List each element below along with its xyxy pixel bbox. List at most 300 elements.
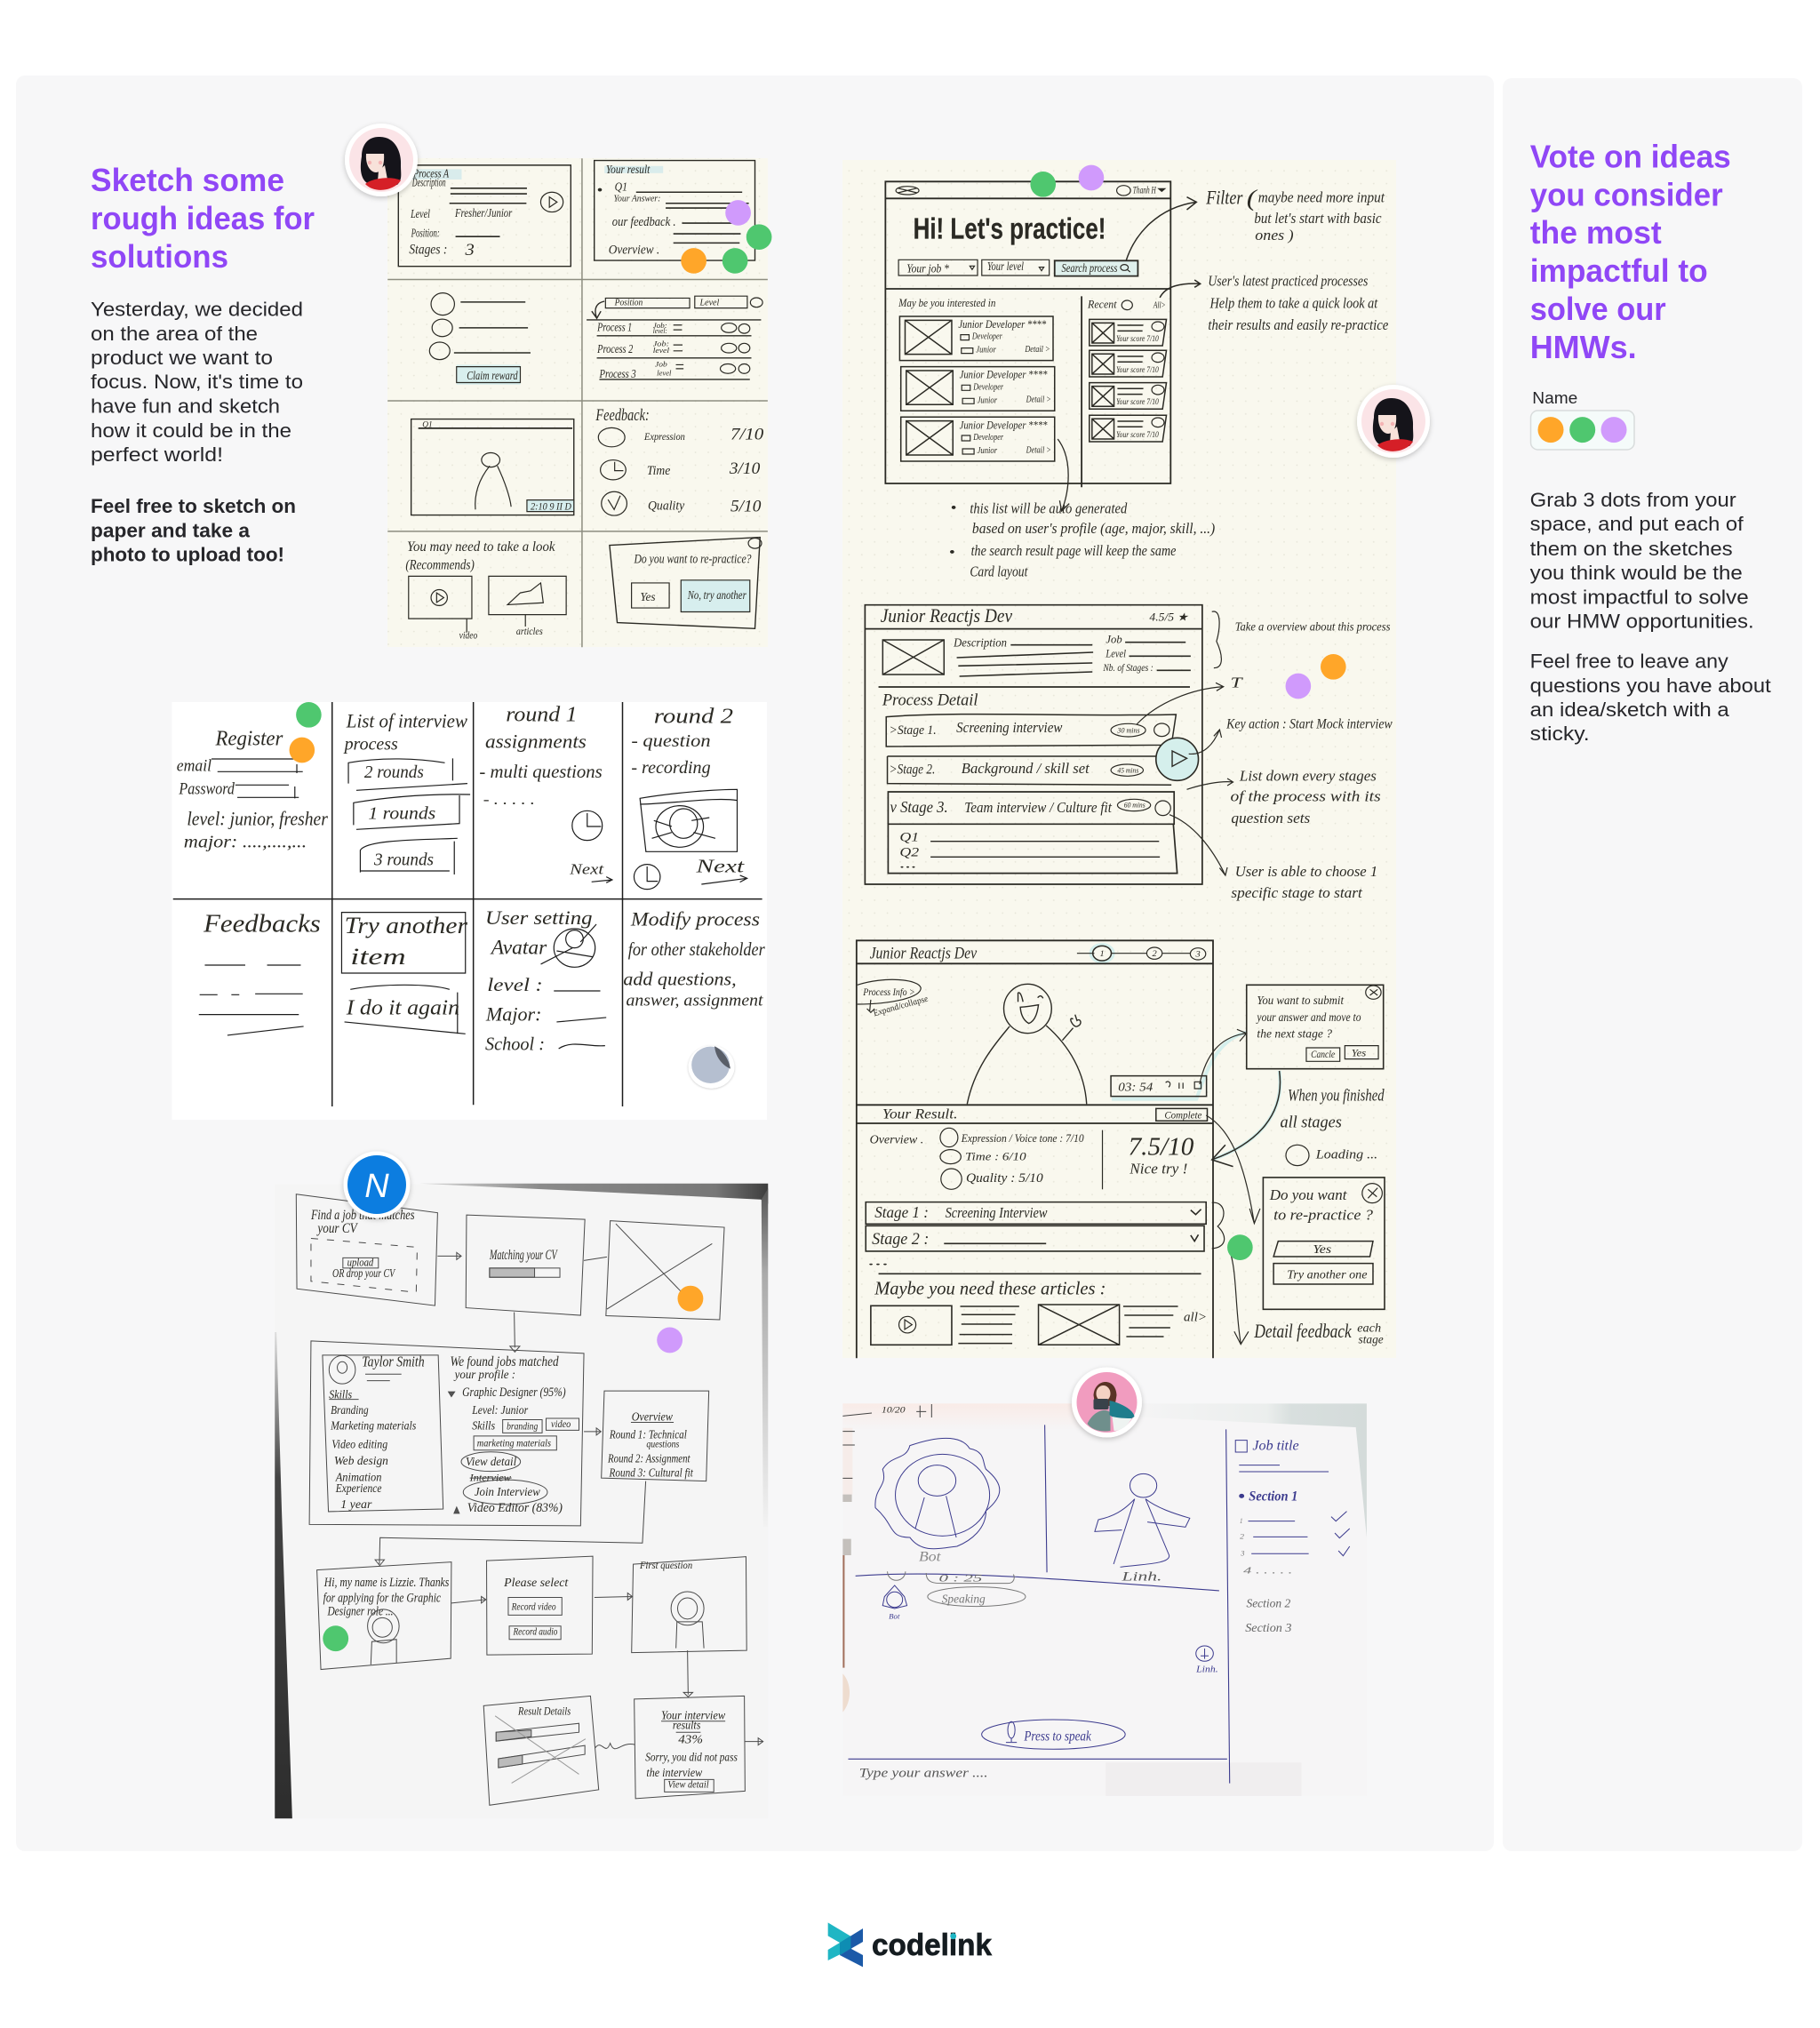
character: smiling avatar [967,984,1087,1104]
wireframe: process description: Position: [411,227,440,240]
frame: overview: Junior Reactjs Dev [881,604,1013,627]
cell: modify process: Modify process [630,907,760,930]
cell: try another: I do it again [346,995,459,1020]
list: recent cards: Recent [1087,299,1117,311]
heading: sketch some rough ideas: rough ideas for [91,200,315,236]
wireframe: process description: Level [410,208,430,221]
wireframe: recommendations: You may need to take a look [407,539,555,555]
cell: modify process: add questions, [623,970,737,989]
cell: feedbacks [199,911,321,1035]
screen: profile and matched jobs: Video editing [331,1437,387,1451]
text block: intro: product we want to [91,347,273,369]
cell: modify process: answer, assignment [627,991,763,1010]
results section: Overview . [870,1133,923,1146]
arrow and bullets: auto generated list: Card layout [970,563,1028,580]
wireframe: process list: Job: [653,340,669,348]
sketch background: notebook wireframes [387,158,768,647]
arrows and note: detail feedback: stage [1359,1333,1384,1346]
frame: overview: 4.5/5 ★ [1149,611,1189,624]
search controls: Search process [1062,261,1117,275]
annotations: process detail notes: T [1231,675,1243,691]
articles: all> [1184,1310,1207,1324]
cell: user setting: User setting [485,906,593,929]
wireframe: feedback scores [595,405,763,515]
wireframe: recommendations: (Recommends) [405,557,475,573]
icon: teal play button [1156,738,1199,780]
sidebar: sections: Job title [1252,1438,1299,1453]
modal: re-practice [1263,1178,1385,1309]
list: process stages: 45 mins [1117,767,1139,775]
frame: interview: Junior Reactjs Dev [870,943,977,962]
avatar: girl with dark hair [1357,385,1430,458]
cell: register: Register [215,727,283,750]
arrow: all stages finished: When you finished [1288,1086,1385,1105]
vote dots [290,702,322,762]
text block: grab 3 dots: most impactful to solve [1530,587,1749,608]
wireframe: your result: Your Answer: [614,193,660,204]
text block: intro: how it could be in the [91,419,291,442]
frame: overview: Nb. of Stages : [1103,663,1153,674]
text block: intro [91,299,303,466]
wireframe: feedback scores: Feedback: [595,405,650,424]
figure: bot [875,1438,1000,1564]
wireframe: claim reward [429,293,531,385]
text block: grab 3 dots: space, and put each of [1530,513,1744,535]
heading: vote on ideas: solve our [1530,291,1666,327]
search controls: Your job * [906,262,950,275]
screen: upload CV: upload [347,1257,374,1269]
cell: interview process: 3 rounds [373,850,434,869]
cell: try another: item [350,943,406,970]
stage accordion: Stage 2 : [872,1230,929,1248]
video control bar [1111,1029,1247,1097]
frame: interview: 2 [1152,949,1157,959]
screen: interview results: Your interview [661,1708,726,1722]
list: interested cards: Junior [978,395,997,405]
wireframe: process list: level: [653,328,667,336]
arrow: all stages finished: Loading ... [1315,1146,1377,1162]
cell: user setting: level : [487,975,543,995]
screen: profile and matched jobs: Interview [468,1473,511,1484]
results section: Quality : 5/10 [966,1170,1043,1185]
screen: interview results [595,1696,763,1799]
info pill: Expand/collapse [871,994,930,1018]
cell: try another: Try another [345,912,468,938]
text block: leave questions: an idea/sketch with a [1530,699,1730,721]
cell: round 1: - multi questions [479,762,603,782]
screen: profile and matched jobs: Skills [472,1418,495,1433]
wireframe: feedback scores: 7/10 [730,425,763,443]
list: interested cards: Developer [973,382,1003,392]
screen: profile and matched jobs: your profile : [453,1368,515,1382]
screen: matching CV [466,1215,607,1352]
screen: profile and matched jobs: Join Interview [475,1485,541,1498]
modal: submit answer: your answer and move to [1256,1011,1361,1024]
screen: profile and matched jobs: Level: Junior [471,1403,528,1417]
list: interested cards: Developer [973,432,1003,443]
modal: submit answer: Cancle [1311,1049,1335,1060]
screen: record select: Please select [503,1576,569,1589]
list: process stages: ... [899,857,917,871]
heading: vote on ideas: impactful to [1530,252,1708,289]
arrow: all stages finished [1212,1071,1385,1167]
annotations: process detail notes: User is able to choose 1 [1235,864,1377,880]
articles [871,1279,1207,1345]
arrows and note: detail feedback: Detail feedback [1254,1320,1352,1342]
list: interested cards: Junior [976,345,996,355]
figure: bot: Bot [919,1548,942,1564]
list: interested cards: Junior Developer **** [958,319,1047,331]
screen: interview results: the interview [646,1765,703,1779]
screen: upload CV [296,1194,461,1305]
cell: interview process: List of interview [346,709,467,731]
list: process stages: v Stage 3. [890,798,948,816]
vote dots [323,1286,703,1651]
wireframe: your result: Your result [606,164,651,177]
list: process stages: Q2 [899,844,920,859]
list: recent cards: All> [1153,300,1166,310]
wireframe: process list: Process 2 [596,343,634,356]
list: interested cards [898,298,1055,461]
info pill: Process Info > [862,986,915,998]
annotations: process detail notes: Take a overview about this process [1235,619,1391,634]
wireframe: your result: our feedback . [612,213,676,229]
arrows and note: detail feedback: each [1357,1321,1381,1335]
logo: codelink [828,1922,992,1967]
heading: vote on ideas: the most [1530,214,1662,251]
cell: round 2: - question [631,731,711,751]
wireframe: re-practice modal: No, try another [687,589,746,602]
heading: sketch some rough ideas: Sketch some [91,162,284,198]
list: process stages: Process Detail [882,691,978,709]
wireframe: process list: Position [614,297,643,307]
list: interested cards: Developer [971,331,1002,341]
cell: try another [341,912,468,1034]
results section: 7.5/10 [1129,1133,1193,1161]
cell: round 1: - . . . . . [483,792,535,808]
vote dot [1227,1234,1253,1260]
cell: modify process: for other stakeholder [628,939,765,960]
arrow and note: filter [1126,185,1385,260]
wireframe: feedback scores: Time [647,463,670,478]
screen: profile and matched jobs: branding [507,1421,538,1433]
annotations: process detail notes: question sets [1231,810,1310,826]
annotations: process detail notes: specific stage to start [1231,885,1362,901]
list: process stages: Screening interview [956,720,1063,736]
cell: round 1: Next [569,861,604,878]
screen: interviewer greeting: Designer role ... [327,1603,393,1618]
frame: home page [885,181,1170,487]
list: interested cards: May be you interested in [898,298,995,309]
sidebar: sections: 3 [1241,1549,1245,1558]
figure: Linh: Linh. [1121,1569,1161,1584]
sketch: whiteboard flow [172,702,767,1120]
annotations: process detail notes: List down every stages [1239,769,1377,785]
search controls: Your level [987,259,1024,273]
screen: interview overview: Round 2: Assignment [607,1451,690,1465]
text block: leave questions: sticky. [1530,723,1590,745]
text block: grab 3 dots: you think would be the [1530,562,1743,584]
text block: leave questions [1530,650,1771,745]
wireframe: process list: Process 1 [597,321,632,334]
icon: Linh small: Linh. [1195,1665,1218,1674]
modal: submit answer: the next stage ? [1257,1026,1332,1041]
modal: submit answer [1247,985,1384,1069]
screen: profile and matched jobs: Experience [335,1481,382,1495]
list: process stages: Q1 [899,830,919,844]
wireframe: re-practice modal: Yes [640,591,656,604]
screen: profile and matched jobs: View detail [466,1455,517,1469]
wireframe: feedback scores: Quality [648,497,684,513]
wireframe: process description: Description [411,176,446,189]
sketch: home page wireframe [885,165,1389,580]
screen: upload CV: your CV [315,1222,358,1237]
voting token: name and dots [1530,389,1634,450]
wireframe: process description: Stages : [409,242,447,258]
cell: round 1 [479,703,612,882]
annotations: process detail notes: Key action : Start Mock interview [1225,716,1393,731]
arrow and note: filter: ones ) [1255,227,1294,244]
list: process stages [882,691,1177,874]
results section [870,1106,1207,1189]
panel: sketch board [16,76,1494,1851]
screen: interview overview: questions [646,1439,679,1450]
heading: vote on ideas [1530,139,1731,365]
scribbles: top-left notes: 10/20 [882,1406,906,1415]
status row: 0 : 25 [938,1572,983,1584]
text block: upload note [91,495,296,565]
screen: matching CV: Matching your CV [489,1248,558,1263]
avatar: woman with camera [1072,1367,1142,1438]
results section: Nice try ! [1129,1162,1187,1178]
frame: overview: Description [953,636,1007,650]
icon: peeling sticker [689,1046,734,1089]
arrow and note: filter: maybe need more input [1258,189,1385,206]
sketch: notebook wireframes [387,158,771,647]
arrow and note: recent processes: Help them to take a quick look at [1209,296,1378,312]
logo: codelink: codelink [872,1928,992,1962]
arrow and note: recent processes: User's latest practiced processes [1208,274,1368,290]
text block: intro: have fun and sketch [91,395,280,418]
screen: record select: Record audio [513,1627,557,1638]
scribbles: top-left notes [842,1404,931,1478]
screen: upload CV: Find a job that matches [310,1209,415,1224]
sidebar: sections: 1 [1240,1517,1242,1526]
list: interested cards: Detail > [1026,395,1051,404]
list: recent cards [1087,299,1167,442]
screen: profile and matched jobs: Web design [334,1454,388,1468]
screen: profile and matched jobs: Taylor Smith [362,1354,425,1370]
arrow and note: filter: but let's start with basic [1254,210,1382,227]
screen: profile and matched jobs: Graphic Designer (95%) [462,1384,566,1399]
wireframe: process list: level [657,370,672,378]
screen: first question: First question [639,1561,692,1572]
frame: interview: 1 [1099,949,1105,959]
text block: intro: on the area of the [91,323,258,345]
wireframe: process description [398,165,571,267]
cell: interview process: 2 rounds [364,762,424,782]
stage accordion: ... [868,1253,890,1268]
avatar: N badge: N [364,1168,389,1205]
screen: profile and matched jobs: Skills [329,1387,352,1401]
modal: submit answer: You want to submit [1257,994,1344,1007]
cell: round 2: round 2 [654,705,733,728]
input: type your answer: Type your answer .... [859,1765,988,1780]
screen: interviewer greeting: Hi, my name is Lizzie. Thanks [323,1574,449,1589]
arrow and bullets: auto generated list: this list will be auto generated [970,501,1128,517]
heading: sketch some rough ideas [91,162,315,275]
sketch background: notebook wireframes right [842,160,1396,1358]
screen: result details [483,1696,599,1805]
cell: user setting: Major: [485,1003,541,1025]
headline: Hi! Let's practice!: Hi! Let's practice! [914,212,1106,245]
sidebar: sections: 2 [1240,1532,1244,1541]
wireframe: process description: Fresher/Junior [454,207,513,220]
screen: crossed placeholder [606,1221,724,1320]
wireframe: video question [411,419,574,515]
cell: user setting: Avatar [490,935,547,958]
wireframe: process description: Process A [412,167,449,180]
wireframe: process list [587,296,762,381]
list: interested cards: Junior [978,445,997,456]
list: recent cards: Your score 7/10 [1116,397,1159,407]
teal highlights [1090,945,1280,1160]
results section: Complete [1164,1110,1201,1122]
stage accordion [866,1202,1206,1273]
arrow and note: filter: ( [1247,185,1257,212]
annotations: process detail notes: of the process with its [1231,789,1381,805]
screen: profile and matched jobs: video [551,1419,571,1430]
wireframe: feedback scores: 5/10 [730,497,762,515]
cell: round 2: - recording [631,758,711,778]
screen: interview overview [375,1391,709,1566]
video control bar: 03: 54 [1118,1080,1153,1094]
list: process stages: Team interview / Culture fit [964,800,1112,816]
text block: grab 3 dots: Grab 3 dots from your [1530,489,1736,511]
status row: Bot [889,1612,900,1620]
sidebar: sections: Section 3 [1245,1622,1291,1635]
avatar: N badge [343,1152,411,1218]
screen: profile and matched jobs: 1 year [340,1497,372,1511]
frame: overview: Job [1106,634,1122,646]
list: interested cards: Junior Developer **** [960,369,1048,381]
search controls [898,259,1138,276]
stage accordion: Screening Interview [946,1205,1048,1221]
arrow and bullets: auto generated list: based on user's profile (age, major, skill, ...) [972,521,1215,537]
modal: re-practice: to re-practice ? [1273,1208,1373,1224]
heading: sketch some rough ideas: solutions [91,238,228,275]
frame: interview: 3 [1195,950,1201,959]
cell: register: level: junior, fresher [187,808,328,829]
list: recent cards: Your score 7/10 [1116,365,1159,375]
modal: re-practice: Try another one [1287,1267,1367,1281]
screen: interview results: View detail [667,1779,709,1791]
screen: record select [487,1556,632,1655]
cell: user setting [485,906,606,1055]
frame: home page: Thanh H [1133,184,1157,196]
text block: upload note: paper and take a [91,520,250,542]
avatar: girl with dark hair [345,124,418,196]
sketch: process detail wireframe [865,604,1393,901]
results section: Your Result. [882,1106,957,1122]
cell: round 2: Next [695,857,746,877]
text block: upload note: Feel free to sketch on [91,495,296,517]
text block: intro: Yesterday, we decided [91,299,303,320]
wireframe: your result: Q1 [615,180,627,194]
wireframe: process description: 3 [465,240,475,259]
sidebar: sections: Section 2 [1246,1598,1291,1610]
wireframe: process list: Job [655,362,667,369]
sketch: paper flow photo [275,1184,768,1818]
wireframe: feedback scores: Expression [643,431,685,443]
text block: grab 3 dots [1530,489,1754,633]
screen: interview overview: Round 1: Technical [609,1427,687,1441]
wireframe: re-practice modal: Do you want to re-practice? [634,552,752,566]
list: recent cards: Your score 7/10 [1116,430,1159,440]
text block: leave questions: questions you have about [1530,675,1771,697]
text block: upload note: photo to upload too! [91,543,284,565]
screen: profile and matched jobs: Marketing materials [330,1418,417,1433]
figure: Linh [1095,1473,1190,1584]
status row: Speaking [942,1593,986,1606]
wireframe: recommendations: video [459,629,477,641]
screen: profile and matched jobs: marketing materials [477,1438,551,1449]
screen: interview results: 43% [678,1732,703,1746]
heading: vote on ideas: HMWs. [1530,329,1637,365]
text block: grab 3 dots: our HMW opportunities. [1530,610,1754,633]
icon: Linh small [1195,1646,1218,1674]
wireframe: process list: Process 3 [599,368,636,381]
arrow and note: recent processes [1160,274,1389,333]
button: press to speak [982,1720,1125,1749]
screen: record select: Record video [511,1601,556,1613]
screen: result details: Result Details [517,1705,571,1718]
wireframe: recommendations [405,539,566,641]
cell: modify process [623,907,765,1010]
wireframe: claim reward: Claim reward [467,370,518,382]
heading: vote on ideas: Vote on ideas [1530,139,1731,175]
wireframe: re-practice modal [610,538,762,628]
list: process stages: Background / skill set [962,761,1090,777]
results section: Time : 6/10 [965,1151,1026,1163]
cell: register [177,727,328,851]
list: interested cards: Detail > [1025,344,1050,355]
cell: register: email [177,755,212,775]
frame: overview: Level [1106,648,1126,660]
text block: grab 3 dots: them on the sketches [1530,538,1733,560]
text block: intro: focus. Now, it's time to [91,371,303,393]
list: interested cards: Junior Developer **** [960,419,1048,432]
cell: register: major: ....,....,... [184,832,307,851]
wireframe: process list: level [653,347,670,355]
screen: profile and matched jobs: Video Editor (83%) [467,1499,563,1514]
cell: interview process: 1 rounds [368,804,435,824]
screen: profile and matched jobs: We found jobs matched [450,1355,559,1370]
screen: profile and matched jobs [309,1341,601,1526]
voting token: name and dots: Name [1532,389,1577,407]
layout lines [848,1425,1230,1784]
wireframe: your result [595,161,755,260]
screen: interview results: results [673,1718,701,1732]
screen: interviewer greeting: for applying for the Graphic [323,1590,441,1605]
wireframe: recommendations: articles [516,626,543,637]
list: interested cards: Detail > [1026,445,1051,455]
text block: leave questions: Feel free to leave any [1530,650,1728,672]
wireframe: video question: Q1 [422,420,433,429]
info pill [858,979,930,1018]
cell: interview process: process [343,734,398,754]
wireframe: process list: Level [699,297,720,307]
